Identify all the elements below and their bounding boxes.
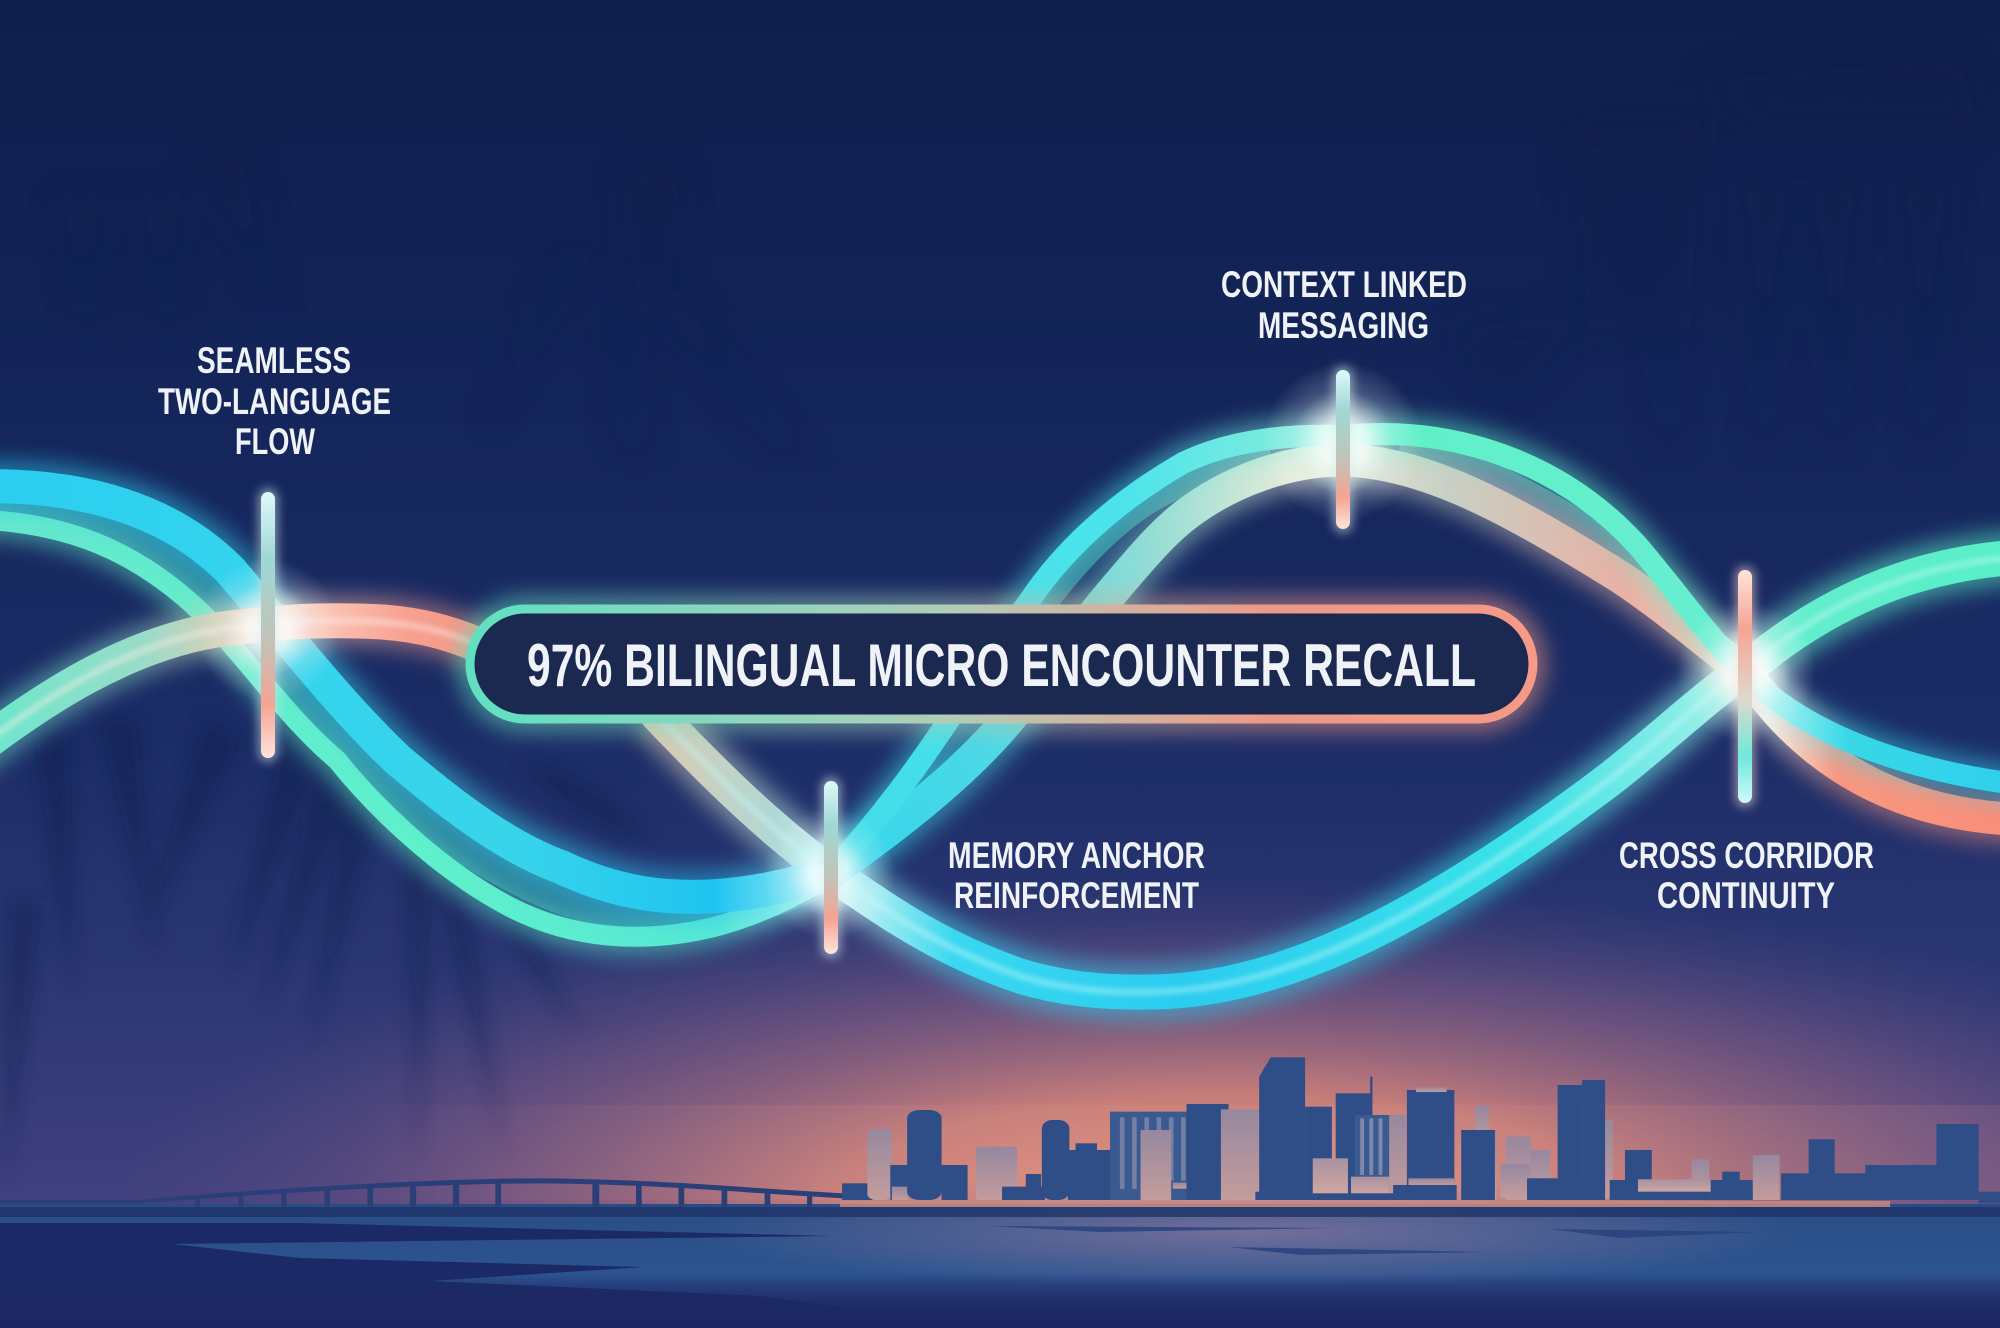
water: left dark streaks (0, 1223, 1000, 1328)
label: memory anchor reinforcement (948, 835, 1205, 916)
ribbon: left cyan strand (0, 486, 835, 897)
ribbon: left gap tint (0, 503, 820, 918)
wave ribbons (0, 434, 2000, 992)
label: cross corridor continuity (1619, 835, 1874, 916)
palm: upper centre (60, 150, 820, 500)
bridge (0, 1178, 844, 1207)
bridge: piers (195, 1183, 812, 1207)
ribbon: crest gap tint left (1030, 450, 1270, 620)
water: horizon band (0, 1207, 2000, 1217)
palm: lower left (6, 710, 650, 1190)
palm: upper right (1450, 60, 1980, 480)
marker pin: memory anchor reinforcement (821, 777, 841, 958)
water: right streaks (990, 1226, 1760, 1255)
marker pin: context linked messaging (1333, 366, 1353, 533)
headline text: 97% BILINGUAL MICRO ENCOUNTER RECALL (527, 632, 1476, 699)
label: cross corridor continuity: CROSS CORRIDOR (1619, 835, 1874, 876)
label: seamless two-language flow: TWO-LANGUAGE (158, 381, 391, 422)
label: context linked messaging (1221, 264, 1467, 346)
label: context linked messaging: CONTEXT LINKED (1221, 264, 1467, 305)
ribbon: crest gap tint right (1400, 445, 1710, 640)
label: seamless two-language flow: FLOW (235, 421, 315, 462)
label: cross corridor continuity: CONTINUITY (1657, 875, 1835, 916)
city skyline (842, 1057, 2000, 1203)
label: memory anchor reinforcement: REINFORCEMENT (954, 875, 1199, 916)
water: bottom fade (0, 1275, 2000, 1328)
water (0, 1176, 2000, 1328)
water: warm horizon line (840, 1201, 1890, 1207)
bridge: deck (0, 1178, 844, 1203)
label: seamless two-language flow: SEAMLESS (197, 340, 351, 381)
label: seamless two-language flow (158, 340, 391, 462)
horizon sky band (0, 1105, 2000, 1200)
marker pin: cross corridor continuity (1735, 566, 1755, 807)
light flares at crossings (196, 362, 1816, 940)
ribbon: upper crest top strand (829, 434, 2000, 874)
marker pin: seamless two-language flow (258, 488, 278, 762)
ribbon: upper crest lower strand (829, 460, 2000, 874)
ribbon: left mint strand (0, 519, 835, 937)
ribbon: left salmon strand (0, 621, 490, 762)
background: sunset glow (0, 870, 2000, 1220)
label: memory anchor reinforcement: MEMORY ANCHOR (948, 835, 1205, 876)
ribbon: mid to bottom to right rising band (655, 556, 2000, 992)
label: context linked messaging: MESSAGING (1258, 305, 1429, 346)
headline pill (470, 609, 1533, 719)
water: centre reflection (690, 1176, 1810, 1288)
